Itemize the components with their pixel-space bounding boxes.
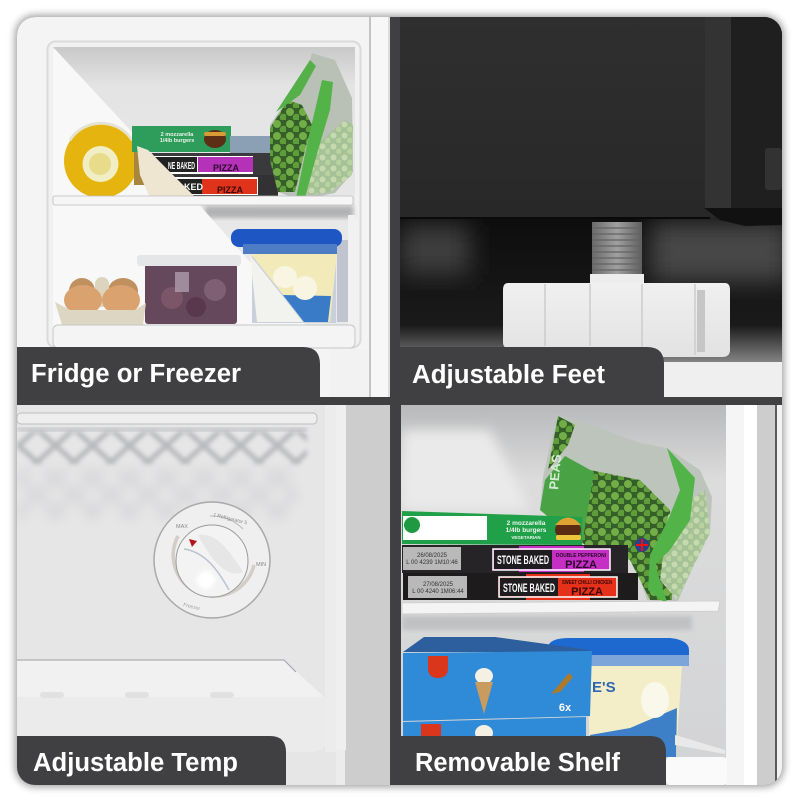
frozen peas bag	[270, 53, 353, 200]
white adjustable foot	[503, 274, 730, 358]
green burger box: 2 mozzarella	[507, 520, 546, 527]
appliance body	[400, 17, 782, 226]
blurred wire shelf	[17, 413, 317, 518]
pizza box: double pepperoni: DOUBLE PEPPERONI	[556, 553, 606, 559]
pizza box: double pepperoni: PIZZA	[565, 559, 597, 571]
compartment frame	[48, 42, 360, 348]
green burger box: VEGETARIAN	[511, 535, 541, 540]
label: Removable Shelf: Removable Shelf	[415, 749, 621, 777]
green burger box: 2 mozzarella	[161, 132, 194, 138]
pizza box: sweet chilli chicken: PIZZA	[571, 586, 603, 598]
blue ice cream cone box	[403, 637, 592, 721]
eggs in carton	[55, 277, 146, 325]
temperature dial: MAX	[176, 524, 188, 530]
green burger box: 1/4lb burgers	[160, 138, 194, 144]
pizza box: pepperoni: PIZZA	[213, 163, 239, 173]
pizza box: pepperoni: NE BAKED	[168, 161, 195, 172]
temperature dial: 1 Refrigerator 5	[213, 512, 248, 526]
ice cream tub	[231, 229, 342, 323]
green burger box: 1/4lb burgers	[506, 527, 547, 534]
panel: removable shelf	[401, 405, 782, 785]
door edge strip	[369, 17, 390, 397]
green burger box	[402, 511, 582, 545]
blue ice cream cone box: 6x	[559, 702, 572, 714]
punnet of plums	[137, 255, 241, 324]
pizza box: sweet chilli: PIZZA	[217, 185, 243, 195]
bottom tray	[17, 660, 324, 697]
threaded screw	[592, 222, 642, 278]
panel: fridge or freezer	[17, 17, 390, 397]
temperature dial	[154, 502, 270, 618]
label: Adjustable Feet	[400, 347, 664, 397]
pizza box: sweet chilli chicken: STONE BAKED	[503, 581, 555, 595]
ice cream tub	[548, 638, 689, 757]
frozen peas bag	[540, 414, 712, 605]
blue grey box	[230, 136, 270, 153]
second blue box	[403, 717, 586, 741]
right side frame	[726, 405, 782, 785]
floor highlight	[664, 362, 782, 398]
pizza box: double pepperoni: 26/08/2025	[417, 553, 448, 559]
bottom tray	[666, 735, 727, 785]
floor strip	[330, 349, 368, 397]
floor backdrop	[400, 218, 782, 363]
jar behind label	[134, 152, 144, 185]
pizza box: sweet chilli chicken	[403, 573, 638, 600]
bottom tray	[53, 325, 355, 348]
ice cream tub: E'S	[592, 679, 616, 696]
pizza box: double pepperoni	[402, 545, 628, 573]
pizza box: sweet chilli chicken: L 00 4240 1M06:44	[412, 589, 464, 595]
wire shelf	[402, 601, 720, 630]
label: Adjustable Temp	[17, 736, 286, 785]
green burger box	[132, 126, 231, 152]
temperature dial: MIN	[256, 562, 266, 568]
pizza box: sweet chilli	[173, 175, 278, 196]
panel: adjustable temp	[17, 405, 390, 785]
label: Fridge or Freezer: Fridge or Freezer	[31, 360, 241, 388]
orange juice bottle	[64, 123, 138, 198]
pizza box: sweet chilli chicken: 27/08/2025	[423, 582, 454, 588]
pizza box: pepperoni	[150, 153, 274, 175]
label: Removable Shelf	[400, 736, 666, 785]
side frame	[336, 405, 390, 785]
compartment interior	[53, 47, 355, 329]
pizza box: sweet chilli: KED	[184, 182, 204, 192]
wire shelf	[53, 196, 353, 205]
label: Adjustable Feet: Adjustable Feet	[412, 361, 606, 389]
frozen peas bag: PEAS	[546, 453, 564, 490]
pizza box: sweet chilli chicken: SWEET CHILLI CHICKEN	[562, 580, 612, 586]
pizza box: double pepperoni: STONE BAKED	[497, 553, 549, 567]
temperature dial: Freezer	[183, 602, 201, 612]
pizza box: double pepperoni: L 00 4239 1M10:46	[406, 560, 458, 566]
panel: adjustable feet	[400, 17, 790, 398]
juice carton label	[137, 146, 196, 198]
label: Adjustable Temp: Adjustable Temp	[33, 749, 238, 777]
label: Fridge or Freezer	[17, 347, 320, 397]
fridge side of tub	[250, 255, 303, 322]
